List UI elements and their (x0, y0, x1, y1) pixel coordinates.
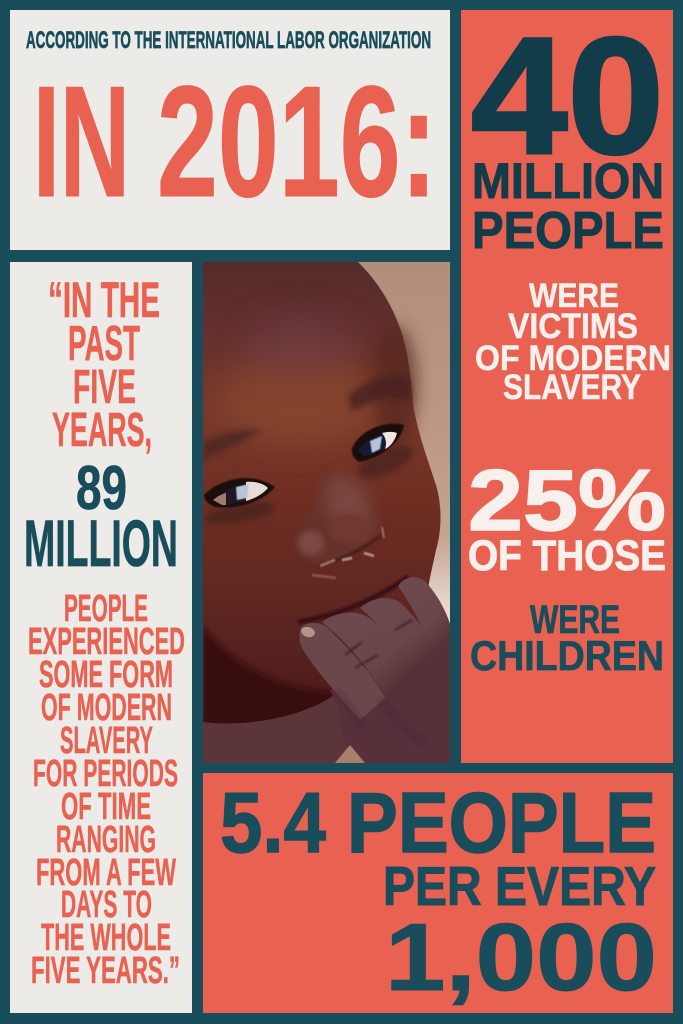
label: million people: PEOPLE (472, 202, 664, 260)
number: 89 million (24, 454, 178, 580)
text: of those: OF THOSE (468, 532, 666, 580)
forehead highlight (226, 361, 366, 442)
panel: 40 million statistics (461, 4, 673, 763)
label: million people (472, 153, 664, 260)
text: were victims of modern slavery: VICTIMS (508, 307, 638, 346)
quote body: RANGING (56, 819, 156, 861)
quote body: OF TIME (61, 786, 151, 828)
quote body: FOR PERIODS (33, 753, 178, 795)
quote body: EXPERIENCED (28, 621, 185, 663)
number: 25 percent: 25% (468, 453, 666, 549)
text: were victims of modern slavery: SLAVERY (503, 368, 641, 407)
shirt collar (203, 692, 352, 763)
quote opening: FIVE (73, 361, 136, 414)
text: were children: CHILDREN (470, 632, 664, 679)
panel: in 2016 header (10, 10, 450, 250)
quote body: FROM A FEW (36, 852, 176, 894)
mouth line (298, 577, 408, 622)
eye right (352, 424, 404, 462)
nose (296, 468, 382, 566)
text: were children: WERE (530, 598, 620, 642)
quote body: DAYS TO (61, 884, 152, 926)
nose crust (312, 527, 384, 578)
lower face shadow (203, 627, 333, 724)
text: were victims of modern slavery: OF MODERN (475, 339, 671, 378)
heading: in 2016: 2016: (157, 54, 437, 230)
heading: in 2016 (33, 54, 437, 230)
text: were victims of modern slavery (475, 277, 671, 407)
quote body: PEOPLE (64, 588, 148, 630)
palm (330, 625, 450, 763)
finger: ring (360, 598, 429, 662)
quote opening (48, 272, 160, 457)
finger: little (398, 577, 450, 646)
temple shadow (373, 325, 417, 445)
text: were children (470, 598, 664, 679)
panel: rate per 1,000 (203, 773, 673, 1013)
eye socket shadows (356, 444, 414, 480)
face (203, 262, 440, 748)
quote opening: YEARS, (52, 404, 152, 457)
eyebrows (348, 375, 412, 412)
quote body: OF MODERN (41, 687, 172, 729)
quote body: FIVE YEARS.” (31, 950, 180, 992)
knuckle creases (345, 620, 412, 668)
quote body: SLAVERY (60, 720, 153, 762)
heading: in 2016: IN (33, 54, 130, 230)
hand (299, 577, 452, 763)
number: 1,000: 1,000 (385, 904, 657, 1011)
finger: index with nail (299, 623, 385, 720)
eye left (204, 478, 275, 508)
quote body: THE WHOLE (41, 917, 171, 959)
quote body (28, 588, 185, 992)
quote opening: PAST (68, 317, 140, 371)
number: 89 million: 89 (76, 454, 127, 523)
quote body: SOME FORM (39, 654, 173, 696)
number: 40: 40 (471, 4, 664, 189)
label: million people: MILLION (472, 153, 664, 209)
photo: child's face (190, 255, 452, 770)
finger: middle (322, 612, 406, 688)
quote opening: “IN THE (48, 272, 160, 328)
panel: 89 million quote (10, 262, 192, 1013)
ground at bottom (335, 745, 365, 763)
number: 89 million: MILLION (24, 506, 178, 580)
text: were victims of modern slavery: WERE (529, 277, 619, 315)
